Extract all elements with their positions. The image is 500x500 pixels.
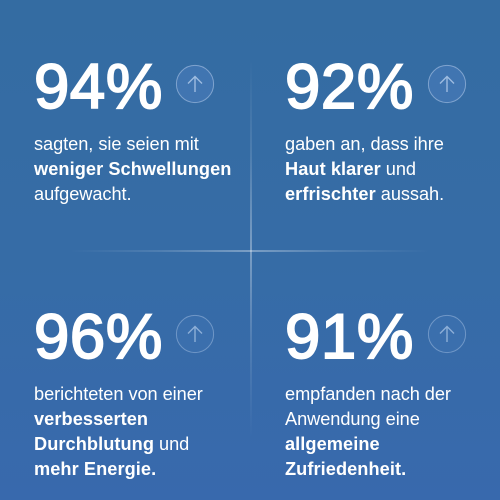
vertical divider [250, 60, 252, 440]
text block [285, 384, 451, 479]
text block [34, 384, 203, 479]
text block: empfanden nach der [285, 384, 451, 404]
text block: mehr Energie. [34, 459, 156, 479]
text block: berichteten von einer [34, 384, 203, 404]
text block: gaben an, dass ihre [285, 134, 444, 154]
icon: up arrow [176, 314, 214, 354]
icon: up arrow [176, 64, 214, 104]
text block: verbesserten [34, 409, 148, 429]
text block [285, 134, 444, 204]
text block: Anwendung eine [285, 409, 420, 429]
panel: 91% stat [285, 302, 466, 479]
number: 96%: 96% [34, 302, 163, 372]
text block: Zufriedenheit. [285, 459, 406, 479]
text block: sagten, sie seien mit [34, 134, 199, 154]
text block: Haut klarer und [285, 159, 416, 179]
number: 92%: 92% [285, 52, 414, 122]
text block: Durchblutung und [34, 434, 189, 454]
text block: weniger Schwellungen [34, 159, 231, 179]
text block: allgemeine [285, 434, 380, 454]
number: 94%: 94% [34, 52, 163, 122]
text block [34, 134, 231, 204]
icon: up arrow [428, 314, 466, 354]
text block: erfrischter aussah. [285, 184, 444, 204]
panel: 94% stat [34, 52, 231, 204]
number: 91%: 91% [285, 302, 414, 372]
icon: up arrow [428, 64, 466, 104]
horizontal divider [70, 250, 430, 252]
panel: 96% stat [34, 302, 214, 479]
text block: aufgewacht. [34, 184, 132, 204]
panel: 92% stat [285, 52, 466, 204]
